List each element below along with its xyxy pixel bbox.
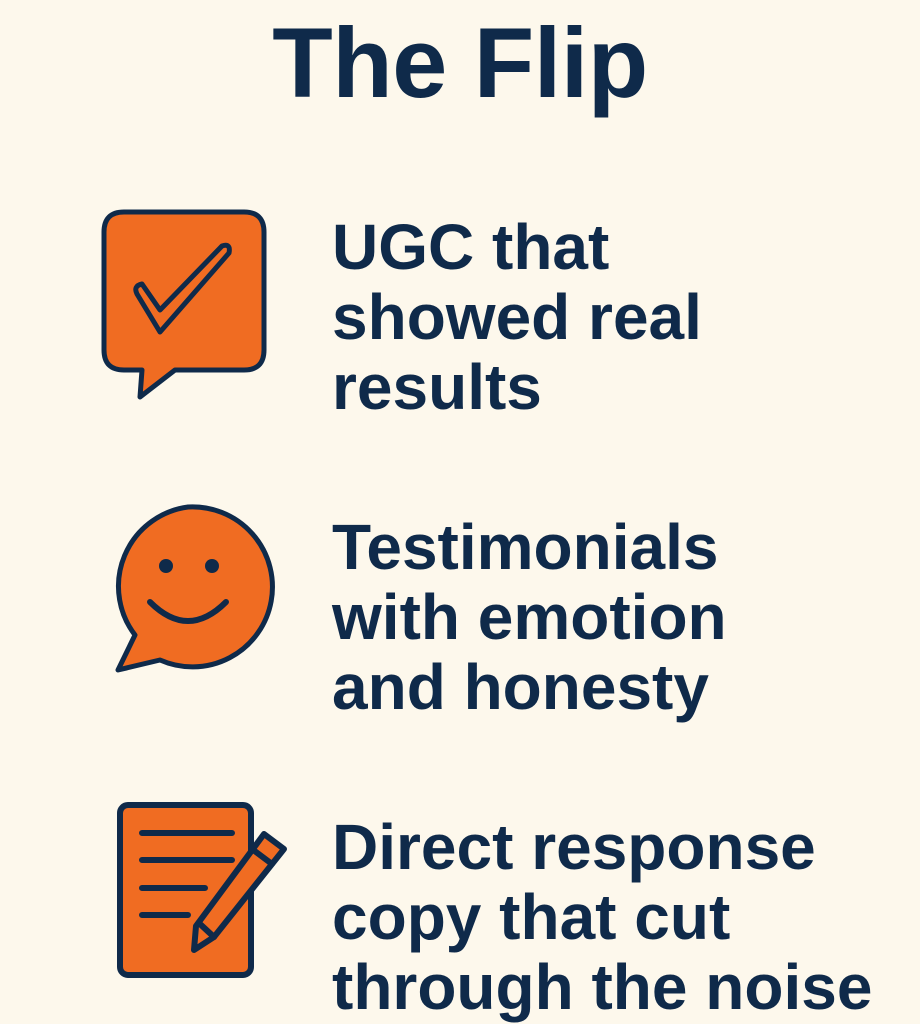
text: item 3: through the noise [332, 951, 872, 1023]
text: item 1: showed real [332, 281, 702, 353]
text: item 3 [332, 811, 872, 1023]
text: item 2: Testimonials [332, 511, 718, 583]
text: item 1: results [332, 351, 542, 423]
text: item 3: copy that cut [332, 881, 730, 953]
text: item 2: with emotion [332, 581, 727, 653]
text: item 2 [332, 511, 727, 723]
title: The Flip [272, 7, 648, 118]
icon: document with pencil [120, 805, 284, 975]
text: item 2: and honesty [332, 651, 709, 723]
text: item 1 [332, 211, 702, 423]
text: item 1: UGC that [332, 211, 609, 283]
icon: smiley speech bubble [118, 507, 272, 670]
text: item 3: Direct response [332, 811, 816, 883]
icon: check speech bubble [104, 212, 264, 397]
